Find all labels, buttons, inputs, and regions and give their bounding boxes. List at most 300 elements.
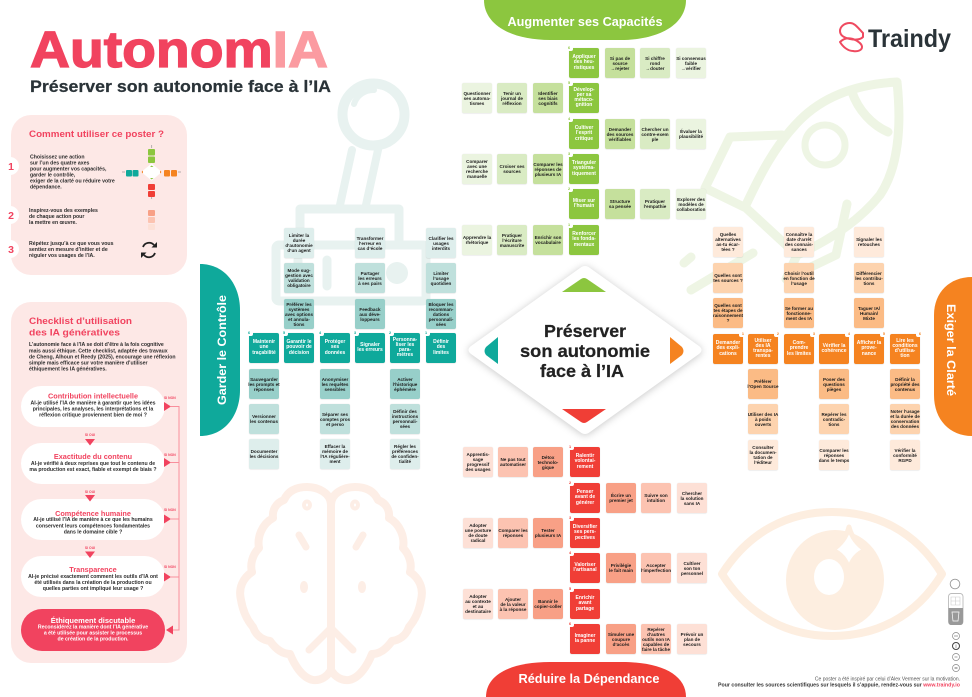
card: Croiser ses: [499, 164, 525, 169]
card: [570, 483, 600, 513]
card: gnition: [576, 102, 592, 108]
card: Signaler: [360, 342, 380, 348]
connector: [171, 406, 179, 630]
card: Lire les: [896, 338, 914, 344]
icon: eye: [722, 512, 942, 636]
card: Utiliser des IA: [748, 412, 778, 416]
diamond title: face à l’IA: [540, 361, 624, 381]
card: Demander: [716, 340, 740, 346]
card: tes étapes de: [713, 308, 743, 313]
pill: éthiquement discutable: [21, 609, 165, 651]
card: interdits: [432, 246, 450, 250]
card: Pratiquer: [645, 199, 665, 204]
step 2 text: la mettre en œuvre.: [29, 220, 77, 226]
card: contenus: [895, 386, 915, 392]
card: [533, 154, 563, 184]
panel: checklist: [11, 302, 187, 663]
card: [606, 553, 636, 583]
step 3 badge: [1, 240, 19, 258]
card: gique: [542, 464, 554, 470]
card: 1: [742, 332, 744, 336]
card: Humain/: [860, 310, 878, 316]
card: les contenus: [250, 419, 278, 424]
card: Demander: [609, 126, 631, 132]
card: Enrichir son: [535, 235, 561, 240]
card: [533, 83, 563, 113]
card: [533, 518, 563, 548]
step 2 text: [29, 208, 98, 226]
card: [713, 263, 743, 293]
card: [748, 440, 778, 470]
card: Adopter: [469, 523, 487, 528]
card: à ses pairs: [358, 280, 382, 286]
arrows: si non: SI NON: [164, 565, 176, 569]
card: 4: [569, 551, 571, 555]
card: [390, 404, 420, 434]
card: réflexion: [502, 100, 522, 106]
card: sées: [400, 424, 410, 429]
card: tiquement: [572, 171, 596, 177]
card: Miser sur: [573, 198, 595, 204]
card: Consulter: [752, 445, 774, 450]
card: vérifiables: [609, 136, 631, 142]
card: [676, 189, 706, 219]
checklist heading: Checklist d’utilisation: [29, 316, 132, 327]
icon: joystick: [276, 84, 426, 301]
card: volontai-: [575, 458, 595, 464]
card: données: [325, 350, 345, 356]
card: contre-exem: [641, 132, 669, 136]
card: [533, 589, 563, 619]
arrows: si non: SI NON: [164, 508, 176, 512]
card: Com-: [793, 340, 805, 346]
card: les prompts et: [248, 382, 280, 386]
card: Imaginer: [575, 633, 595, 639]
footer credits: Ce poster a été inspiré par celui d’Alex Vermeer sur la motivation.: [815, 677, 960, 683]
card: Versionner: [252, 414, 276, 419]
card: à poids: [755, 416, 771, 422]
icon: creative commons badges: [952, 632, 960, 672]
card: Comparer les: [533, 162, 563, 166]
card: sage: [473, 457, 483, 462]
card: Enrichir: [576, 595, 594, 601]
card: conformité: [893, 452, 917, 458]
card: →rejeter: [611, 66, 629, 70]
card: technolo-: [538, 460, 558, 464]
card: [748, 369, 778, 399]
card: Bannir le: [538, 599, 558, 604]
card: [249, 369, 279, 399]
card: rentes: [755, 353, 770, 359]
card: Cultiver: [575, 125, 593, 131]
step 2 text: de chaque action pour: [29, 214, 84, 220]
card: [606, 483, 636, 513]
pill: contribution intellectuelle: AI-je utilisé l’IA de manière à garantir que les idées: [31, 400, 156, 406]
card: Quelles sont: [714, 303, 742, 308]
card: rond: [650, 60, 660, 66]
card: cas d’école: [358, 246, 382, 250]
card: de doute: [468, 533, 488, 538]
card: des usages: [465, 467, 491, 472]
card: [713, 334, 743, 364]
pill: transparence: été utilisés dans la création de la production ou: [34, 580, 152, 586]
arrow: red: [562, 409, 606, 423]
card: raisonnement: [713, 313, 743, 318]
pill: contribution intellectuelle: Contribution intellectuelle: [48, 392, 138, 400]
card: les décisions: [250, 454, 278, 459]
card: et au: [473, 604, 483, 609]
card: d’un agent: [287, 248, 311, 253]
card: cohérence: [821, 348, 846, 354]
card: Adopter: [469, 594, 487, 599]
card: alternatives: [715, 237, 741, 242]
card: Noter l’usage: [890, 409, 920, 414]
card: gestion avec: [285, 273, 313, 278]
card: [640, 48, 670, 78]
card: vocabulaire: [535, 240, 561, 245]
card: per sa: [577, 92, 591, 98]
card: conservation: [891, 419, 919, 424]
card: [676, 48, 706, 78]
card: ses: [331, 344, 339, 350]
card: ment: [330, 459, 340, 464]
card: la solution: [681, 496, 703, 500]
pill: transparence: Transparence: [69, 565, 117, 574]
pill: exactitude du contenu: ma production est exact, fiable et exempt de biais ?: [29, 467, 157, 473]
card: Régler les: [394, 444, 416, 449]
card: 5: [283, 331, 285, 335]
card: [570, 589, 600, 619]
card: systéma-: [573, 165, 595, 171]
card: 1: [568, 223, 570, 227]
card: Ne pas tout: [500, 457, 526, 462]
step 2 badge: 2: [8, 210, 14, 222]
card: aux déve-: [359, 312, 381, 316]
card: [784, 263, 814, 293]
card: Suivre son: [644, 493, 668, 498]
card: Définir la: [895, 376, 915, 382]
card: [677, 483, 707, 513]
card: fonctionne-: [786, 310, 812, 316]
card: 2: [569, 481, 571, 485]
card: [497, 154, 527, 184]
card: [569, 225, 599, 255]
card: d’autonomie: [285, 243, 313, 248]
card: comptes pros: [320, 416, 350, 422]
card: [426, 263, 456, 293]
card: [854, 263, 884, 293]
icon: mini axis diagram: [122, 145, 181, 199]
card: Taguer IA/: [858, 306, 880, 310]
card: conditions: [892, 343, 918, 349]
card: Se former au: [785, 306, 813, 310]
step 1 badge: 1: [8, 161, 14, 173]
card: [390, 369, 420, 399]
card: rement: [577, 464, 593, 470]
card: Comparer: [466, 159, 488, 164]
card: l’IA régulière-: [320, 454, 350, 459]
card: 6: [569, 622, 571, 626]
arrows: si non: [164, 396, 176, 634]
card: 6: [919, 332, 921, 336]
card: →douter: [646, 66, 664, 70]
card: [463, 518, 493, 548]
card: radical: [471, 538, 485, 543]
card: Utiliser: [755, 338, 771, 344]
card: [533, 225, 563, 255]
card: [426, 299, 456, 329]
card: Afficher la: [857, 340, 881, 346]
card: plusieurs IA: [535, 533, 561, 538]
card: Prévoir un: [681, 632, 703, 636]
card: [570, 553, 600, 583]
card: [890, 440, 920, 470]
card: Repérer: [647, 626, 665, 632]
card: Tenir un: [503, 90, 521, 96]
card: [320, 333, 350, 363]
card: les contribu-: [855, 276, 883, 280]
card: [784, 298, 814, 328]
card: Bloquer les: [428, 302, 454, 306]
card: obligatoire: [287, 283, 311, 288]
card: ple: [652, 136, 658, 142]
tab: Exiger la Clarté: [934, 277, 972, 436]
card: Choisir l’outil: [784, 270, 814, 276]
card: [320, 404, 350, 434]
card: Feedback: [359, 306, 381, 312]
card: [462, 154, 492, 184]
card: Accepter: [646, 563, 666, 568]
card: copier-coller: [534, 604, 562, 609]
checklist heading: des IA génératives: [29, 328, 120, 338]
card: ?: [727, 318, 729, 323]
card: Apprentis-: [467, 452, 489, 457]
card: cations: [719, 351, 737, 357]
card: quotidien: [431, 280, 451, 286]
card: la documen-: [749, 450, 777, 455]
card: [249, 404, 279, 434]
card: 4: [568, 117, 570, 121]
card: 2: [568, 187, 570, 191]
step 1 text: Choisissez une action: [30, 155, 84, 161]
checklist heading: [29, 316, 132, 338]
card: prendre: [790, 345, 808, 351]
card: manuscrite: [500, 242, 524, 248]
card: 5: [569, 587, 571, 591]
arrow: green: [562, 278, 606, 292]
card: des heu-: [574, 59, 594, 65]
card: [390, 439, 420, 469]
card: [605, 189, 635, 219]
card: 3: [569, 516, 571, 520]
card: manuelle: [467, 174, 487, 179]
pill: compétence humaine: [21, 499, 165, 540]
card: capables de: [643, 642, 669, 646]
tab: Augmenter ses Capacités: Augmenter ses Capacités: [508, 14, 662, 29]
card: Mode sug-: [288, 268, 310, 273]
card: sées: [436, 322, 446, 326]
card: Personna-: [393, 337, 417, 343]
card: instructions: [392, 414, 418, 419]
card: les erreurs: [357, 347, 383, 353]
card: dations: [433, 312, 449, 316]
card: l’imperfection: [641, 568, 671, 573]
diamond title: son autonomie: [520, 341, 650, 361]
card: automatiser: [500, 462, 526, 467]
card: Détox: [542, 454, 554, 460]
card: progressif: [467, 462, 489, 467]
axis: Augmenter ses Capacités (green cards): [462, 46, 706, 256]
card: Trianguler: [572, 160, 596, 166]
card: avec options: [285, 312, 313, 316]
card: nance: [862, 351, 876, 357]
card: mètres: [397, 352, 413, 358]
pill: transparence: [21, 556, 165, 597]
card: [819, 440, 849, 470]
panel heading: Comment utiliser ce poster ?: [29, 129, 164, 139]
card: [462, 225, 492, 255]
card: décision: [289, 350, 309, 356]
pill: éthiquement discutable: Éthiquement discutable: [51, 616, 135, 625]
card: critique: [575, 136, 593, 142]
card: 6: [248, 331, 250, 335]
arrows: si oui: [85, 433, 95, 558]
card: plan de: [684, 636, 700, 642]
card: Signaler les: [856, 237, 882, 242]
card: l’erreur en: [359, 240, 381, 246]
card: tées ?: [721, 247, 735, 252]
card: des expli-: [716, 345, 740, 351]
card: 3: [568, 152, 570, 156]
card: [819, 369, 849, 399]
card: Privilégie: [611, 563, 631, 568]
card: [748, 334, 778, 364]
diamond title: [520, 321, 650, 381]
tab: Réduire la Dépendance: Réduire la Dépendance: [518, 671, 660, 686]
card: [355, 263, 385, 293]
card: les fonda-: [572, 236, 596, 242]
card: Quelles sont: [714, 273, 742, 278]
card: [284, 228, 314, 258]
card: [249, 333, 279, 363]
card: [355, 228, 385, 258]
card: en fonction de: [783, 276, 815, 280]
card: Vérifier la: [895, 448, 915, 452]
card: Chercher: [682, 490, 702, 496]
card: recherche: [466, 169, 488, 174]
card: tions: [294, 322, 304, 326]
arrows: si oui: SI OUI: [85, 490, 95, 494]
card: mémoire de: [322, 449, 348, 454]
card: [355, 299, 385, 329]
arrows: si oui: SI OUI: [85, 433, 95, 437]
card: Préférer: [754, 379, 772, 384]
card: plausibilité: [679, 134, 703, 139]
card: limites: [433, 350, 449, 356]
card: transpa-: [753, 348, 773, 354]
card: l’humain: [574, 203, 594, 209]
card: les requêtes: [322, 382, 348, 386]
card: [713, 227, 743, 257]
step 3 text: réguler vos usages de l’IA.: [29, 253, 95, 259]
card: Si chiffre: [645, 56, 665, 60]
arrows: si non: SI NON: [164, 453, 176, 457]
card: loppeurs: [360, 316, 380, 322]
card: [284, 299, 314, 329]
card: Anonymiser: [322, 376, 348, 382]
card: [569, 48, 599, 78]
card: pièges: [827, 386, 841, 392]
pill: éthiquement discutable: Reconsidérez la manière dont l’IA générative: [38, 625, 148, 631]
card: tes sources ?: [713, 278, 743, 283]
card: coupure: [612, 636, 630, 642]
card: Clarifier les: [428, 236, 454, 240]
card: ouverts: [755, 422, 771, 426]
step 2 badge: [1, 206, 19, 224]
card: sources: [503, 169, 521, 174]
card: réponses: [824, 452, 844, 458]
card: Structure: [610, 199, 630, 204]
card: Limiter: [433, 270, 449, 276]
card: recomman-: [429, 306, 453, 312]
card: l’usage: [433, 276, 449, 280]
card: des données: [891, 424, 919, 429]
card: Renforcer: [572, 231, 596, 237]
pill: exactitude du contenu: Exactitude du contenu: [54, 452, 132, 461]
checklist intro: simple mais efficace sur votre manière d’utiliser: [29, 360, 148, 366]
card: faire la tâche: [642, 646, 670, 652]
checklist intro: de Cheng, Alhoun et Reedy (2025), encourage une réflexion: [29, 354, 176, 360]
step 1 text: [30, 155, 115, 191]
card: Définir: [433, 339, 449, 345]
card: modèles de: [678, 202, 704, 206]
tab: Augmenter ses Capacités: [484, 0, 686, 40]
pill: éthiquement discutable: de création de la production.: [58, 637, 129, 643]
card: [605, 48, 635, 78]
card: 1: [425, 331, 427, 335]
card: de la valeur: [500, 602, 526, 606]
pill: contribution intellectuelle: [21, 386, 165, 427]
card: [569, 154, 599, 184]
pill: exactitude du contenu: [21, 443, 165, 484]
card: [497, 83, 527, 113]
card: 2: [389, 331, 391, 335]
card: Penser: [577, 489, 593, 495]
card: l’artisanal: [573, 567, 597, 573]
card: mentaux: [574, 242, 594, 248]
card: [498, 447, 528, 477]
card: l’historique: [393, 382, 417, 386]
card: avant: [578, 600, 592, 606]
card: [784, 334, 814, 364]
card: Comparer les: [819, 448, 849, 452]
step 1 text: exiger de la clarté ou réduire votre: [30, 179, 115, 185]
card: [569, 189, 599, 219]
card: [641, 553, 671, 583]
card: [320, 369, 350, 399]
card: Garantir le: [286, 339, 312, 345]
card: prove-: [861, 345, 877, 351]
card: [641, 624, 671, 654]
card: et perso: [326, 422, 344, 426]
card: d’accès: [613, 642, 629, 646]
title: Autonom IA: [30, 21, 328, 78]
step 2 text: Inspirez-vous des exemples: [29, 208, 98, 214]
pill: éthiquement discutable: a été utilisée pour assister le processus: [44, 631, 142, 637]
card: [606, 624, 636, 654]
card: pouvoir de: [286, 344, 312, 350]
card: [748, 404, 778, 434]
